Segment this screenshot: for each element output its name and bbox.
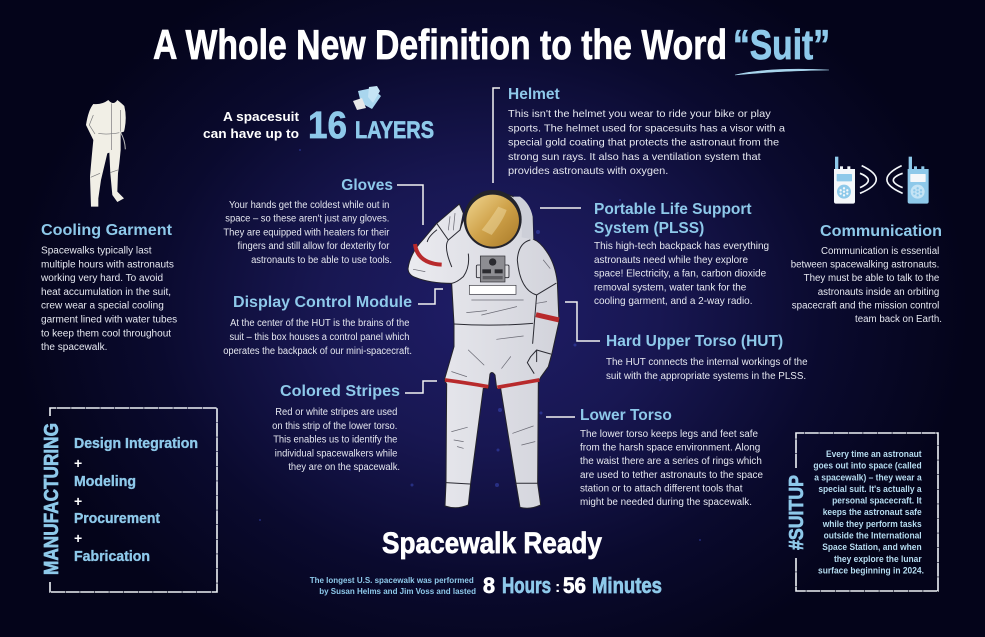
backpack shading [513, 197, 533, 239]
panel: communication [791, 223, 942, 325]
heading: Helmet [508, 86, 560, 103]
item list: Modeling [74, 473, 136, 490]
callout: 16 layers: 16 [308, 105, 347, 147]
text block: heat accumulation in the suit, [41, 287, 171, 298]
text block: space! Electricity, a fan, carbon dioxide [594, 268, 766, 280]
text block: garment lined with water tubes [41, 314, 177, 326]
text block: goes out into space (called [813, 460, 922, 471]
text block: At the center of the HUT is the brains of the [230, 318, 410, 329]
text block: crew wear a special cooling [41, 301, 164, 312]
text block: sports. The helmet used for spacesuits has a visor with a [508, 123, 785, 134]
callout: 16 layers: A spacesuit [223, 109, 300, 124]
text block: to keep them cool throughout [41, 328, 171, 339]
text block: The HUT connects the internal workings of the [606, 357, 808, 368]
text block: the spacewalk. [41, 342, 107, 353]
text block: they are on the spacewalk. [288, 462, 400, 473]
item list: + [74, 530, 82, 546]
panel: portable life support system [540, 201, 772, 307]
duration: Hours [502, 573, 551, 598]
text block: are used to tether astronauts to the space [580, 470, 763, 481]
heading: Hard Upper Torso (HUT) [606, 333, 783, 350]
text block: might be needed during the spacewalk. [580, 497, 752, 508]
suit seams [413, 213, 556, 484]
text block: They are equipped with heaters for their [223, 227, 390, 239]
title: A Whole New Definition to the Word [153, 21, 727, 68]
text block: station or to attach different tools that [580, 483, 743, 494]
vertical label: #SUITUP [786, 475, 808, 550]
heading: Colored Stripes [280, 383, 400, 400]
text block: Every time an astronaut [826, 449, 922, 459]
text block: multiple hours with astronauts [41, 259, 174, 270]
text block: They must be able to talk to the [804, 273, 940, 284]
heading: Communication [820, 223, 942, 240]
heading: System (PLSS) [594, 220, 704, 237]
text block: astronauts need while they explore [594, 255, 748, 266]
text block: Space Station, and when [822, 542, 922, 552]
text block: surface beginning in 2024. [818, 565, 924, 576]
text block: This enables us to identify the [273, 434, 398, 446]
text block: special suit. It's actually a [818, 483, 923, 494]
text block: outside the International [824, 530, 922, 541]
text block: individual spacewalkers while [275, 448, 398, 460]
callout: 16 layers [203, 86, 434, 147]
text block: keeps the astronaut safe [823, 507, 922, 517]
callout: 16 layers: LAYERS [355, 117, 434, 144]
item list: + [74, 455, 82, 471]
connector arrow [565, 302, 600, 341]
item list [74, 435, 198, 565]
connector arrow [546, 416, 575, 418]
icon: layers [353, 86, 381, 110]
heading: Portable Life Support [594, 201, 752, 218]
text block: space – so these aren't just any gloves. [225, 213, 389, 225]
duration [483, 573, 662, 598]
text block: spacecraft and the mission control [792, 300, 939, 312]
panel: hard upper torso [565, 302, 810, 382]
text block: astronauts to be able to use tools. [251, 254, 392, 266]
text block: from the harsh space environment. Along [580, 442, 761, 454]
connector arrow [540, 207, 581, 209]
panel: lower torso [546, 407, 766, 508]
text block: astronauts inside an orbiting [818, 287, 939, 298]
panel: manufacturing [40, 408, 217, 592]
red stripes [415, 244, 559, 387]
frame [50, 408, 217, 592]
text block: The longest U.S. spacewalk was performed [310, 576, 474, 585]
name plate [469, 285, 516, 294]
title: “Suit” [733, 21, 830, 68]
connector arrow [397, 185, 423, 225]
text block: cooling garment, and a 2-way radio. [594, 296, 752, 307]
callout: 16 layers: can have up to [203, 126, 299, 141]
text block: This isn't the helmet you wear to ride your bike or play [508, 108, 771, 120]
connector arrow [493, 88, 500, 183]
text block: Your hands get the coldest while out in [229, 200, 389, 211]
icon: radios [834, 157, 929, 204]
callout: longest spacewalk [310, 573, 662, 598]
item list: Fabrication [74, 548, 150, 565]
heading: Gloves [341, 177, 393, 194]
text block: fingers and still allow for dexterity for [238, 241, 390, 252]
text block: Red or white stripes are used [275, 407, 397, 418]
panel: suitup [786, 433, 938, 591]
text block: removal system, water tank for the [594, 282, 747, 293]
text block: on this strip of the lower torso. [272, 420, 397, 432]
text block: suit – this box houses a control panel which [229, 332, 409, 343]
text block: while they perform tasks [822, 518, 922, 529]
duration: : [555, 579, 560, 596]
heading: Cooling Garment [41, 222, 172, 239]
text block: This high-tech backpack has everything [594, 241, 769, 252]
text block: they explore the lunar [834, 553, 922, 564]
text block: by Susan Helms and Jim Voss and lasted [319, 587, 476, 596]
suit silhouette [408, 193, 559, 508]
helmet [464, 190, 522, 249]
panel: gloves [223, 177, 423, 266]
text block: special gold coating that protects the astronaut from the [508, 137, 779, 149]
heading: Display Control Module [233, 294, 412, 311]
icon: cooling garment [86, 100, 126, 207]
connector arrow [418, 289, 443, 304]
panel: colored stripes [272, 381, 437, 473]
text block: the waist there are a series of rings which [580, 456, 762, 467]
duration: Minutes [592, 573, 662, 598]
duration: 56 [563, 573, 586, 598]
text block: working very hard. To avoid [40, 273, 163, 284]
duration: 8 [483, 573, 495, 598]
panel: helmet [493, 86, 788, 183]
heading: Lower Torso [580, 407, 672, 424]
panel: cooling garment [40, 222, 180, 353]
text block: a spacewalk) – they wear a [814, 472, 923, 482]
heading: spacewalk ready: Spacewalk Ready [382, 527, 602, 560]
text block: provides astronauts with oxygen. [508, 165, 668, 177]
item list: Procurement [74, 510, 160, 527]
text block: operates the backpack of our mini-spacecraft. [223, 346, 412, 357]
vertical label: MANUFACTURING [40, 423, 63, 575]
text block: Spacewalks typically last [41, 245, 152, 257]
astronaut illustration [408, 190, 559, 508]
panel: display control module [223, 289, 443, 357]
text block: suit with the appropriate systems in the PLSS. [606, 371, 806, 382]
text block: Communication is essential [821, 246, 939, 257]
frame [796, 433, 938, 591]
text block: team back on Earth. [855, 314, 942, 325]
item list: Design Integration [74, 435, 198, 452]
text block: personal spacecraft. It [832, 495, 922, 506]
text block: The lower torso keeps legs and feet safe [580, 429, 758, 440]
text block: between spacewalking astronauts. [791, 259, 939, 271]
item list: + [74, 493, 82, 509]
connector arrow [405, 381, 437, 393]
text block: strong sun rays. It also has a ventilation system that [508, 151, 761, 163]
display control module [476, 256, 509, 282]
